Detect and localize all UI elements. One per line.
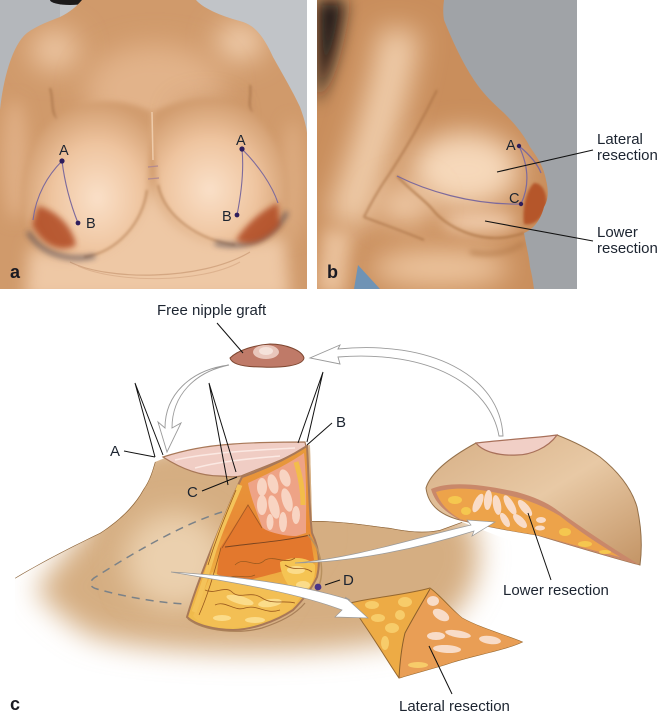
label D	[315, 572, 354, 590]
labels: photo a: B	[222, 209, 232, 225]
lobule pink area	[248, 453, 306, 537]
arrow: wound to lower resection	[295, 520, 495, 563]
panel: illustration c	[10, 302, 641, 715]
labels: photo a	[10, 133, 246, 282]
suture lines	[135, 372, 323, 485]
lateral resection specimen	[350, 588, 522, 678]
arrow: graft to chest	[158, 365, 229, 452]
callout: lateral resection	[399, 646, 510, 715]
incision line	[397, 146, 541, 204]
incision lines	[33, 161, 78, 223]
callout: lower resection: Lower	[597, 224, 638, 241]
label B: B	[336, 414, 346, 431]
labels: photo a: B	[86, 216, 96, 232]
panel: photo b, lateral view	[317, 0, 577, 295]
dashed incision line	[90, 512, 222, 604]
callout: lower resection: resection	[597, 240, 658, 257]
yellow lobules	[193, 572, 306, 628]
wound tissue	[187, 446, 322, 631]
label A: A	[110, 443, 120, 460]
free nipple graft: Free nipple graft	[157, 302, 267, 319]
callout: lateral resection: resection	[597, 147, 658, 164]
labels: photo b: A	[506, 138, 516, 154]
callout: lower resection: Lower resection	[503, 582, 609, 599]
callout: lateral resection: Lateral	[597, 131, 643, 148]
panel: photo a, frontal view	[0, 0, 307, 300]
label C: C	[187, 484, 198, 501]
label D: D	[343, 572, 354, 589]
breast shadow	[28, 232, 95, 258]
lower resection specimen	[426, 435, 641, 565]
callout: lower resection	[485, 221, 658, 257]
labels: photo b	[327, 138, 519, 282]
arrow: resection to graft	[310, 345, 503, 436]
labels: photo b: C	[509, 191, 519, 207]
torso highlights	[410, 132, 520, 208]
labels: photo a: A	[236, 133, 246, 149]
free nipple graft	[157, 302, 304, 367]
callout: lateral resection: Lateral resection	[399, 698, 510, 715]
breasts	[22, 102, 152, 257]
body silhouette	[15, 440, 479, 652]
label B	[307, 414, 346, 445]
panel letter c: c	[10, 694, 20, 714]
labels: photo a: a	[10, 262, 21, 282]
areola shading	[32, 206, 76, 248]
label C	[187, 477, 237, 501]
areola opening	[163, 442, 306, 477]
jeans	[354, 265, 380, 289]
labels: photo a: A	[59, 143, 69, 159]
arrow: wound to lateral resection	[171, 572, 368, 618]
orange fold	[215, 505, 314, 590]
abdomen	[25, 170, 290, 300]
callout: lateral resection	[497, 131, 658, 172]
labels: photo b: b	[327, 262, 338, 282]
arm highlight	[345, 30, 400, 225]
label A	[110, 443, 155, 460]
callout: lower resection	[503, 513, 609, 599]
